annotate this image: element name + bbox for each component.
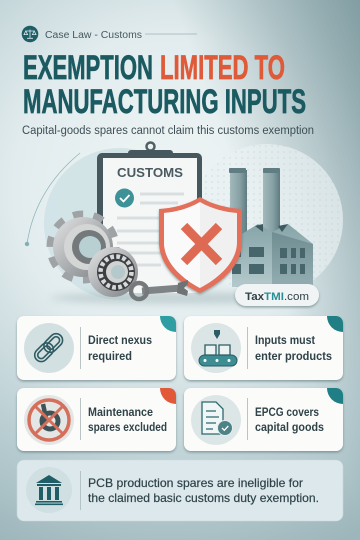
card text: required [88, 349, 132, 363]
icon: factory [229, 168, 313, 287]
icon: conveyor belt [191, 323, 241, 373]
card text: Maintenance [88, 405, 153, 419]
icon: gear [51, 215, 115, 279]
title: EXEMPTION [23, 49, 153, 87]
conclusion text: PCB production spares are ineligible for [88, 476, 303, 490]
card text: enter products [255, 349, 332, 363]
badge: TaxTMI.com: TaxTMI.com [245, 291, 309, 303]
icon: prohibited spares [24, 395, 74, 445]
title: LIMITED TO [160, 49, 285, 87]
conclusion panel [17, 460, 343, 521]
card: inputs must enter products [182, 316, 344, 383]
card: maintenance spares excluded [16, 388, 178, 454]
icon: scales of justice [22, 26, 38, 42]
card text: spares excluded [88, 420, 167, 434]
icon: shield with X [159, 197, 242, 293]
card: direct nexus [16, 316, 178, 383]
subtitle: Capital-goods spares cannot claim this customs exemption [22, 125, 314, 137]
card text: capital goods [255, 420, 324, 434]
conclusion text: the claimed basic customs duty exemption. [88, 491, 319, 505]
header label: Case Law - Customs [45, 30, 142, 41]
card text: Direct nexus [88, 333, 152, 347]
card: EPCG covers capital goods [182, 388, 344, 454]
icon: wrench [131, 280, 188, 299]
header tag: Case Law - Customs [22, 26, 197, 42]
hero illustration [25, 142, 343, 306]
title [23, 49, 306, 121]
icon: courthouse [26, 467, 72, 513]
icon: customs clipboard: CUSTOMS [117, 165, 183, 180]
card text: EPCG covers [255, 405, 319, 419]
card text: Inputs must [255, 333, 315, 347]
icon: customs clipboard [97, 142, 202, 293]
badge: TaxTMI.com [235, 284, 319, 306]
icon: ball bearing [88, 247, 138, 297]
icon: document with check [191, 395, 241, 445]
icon: chain link [24, 323, 74, 373]
